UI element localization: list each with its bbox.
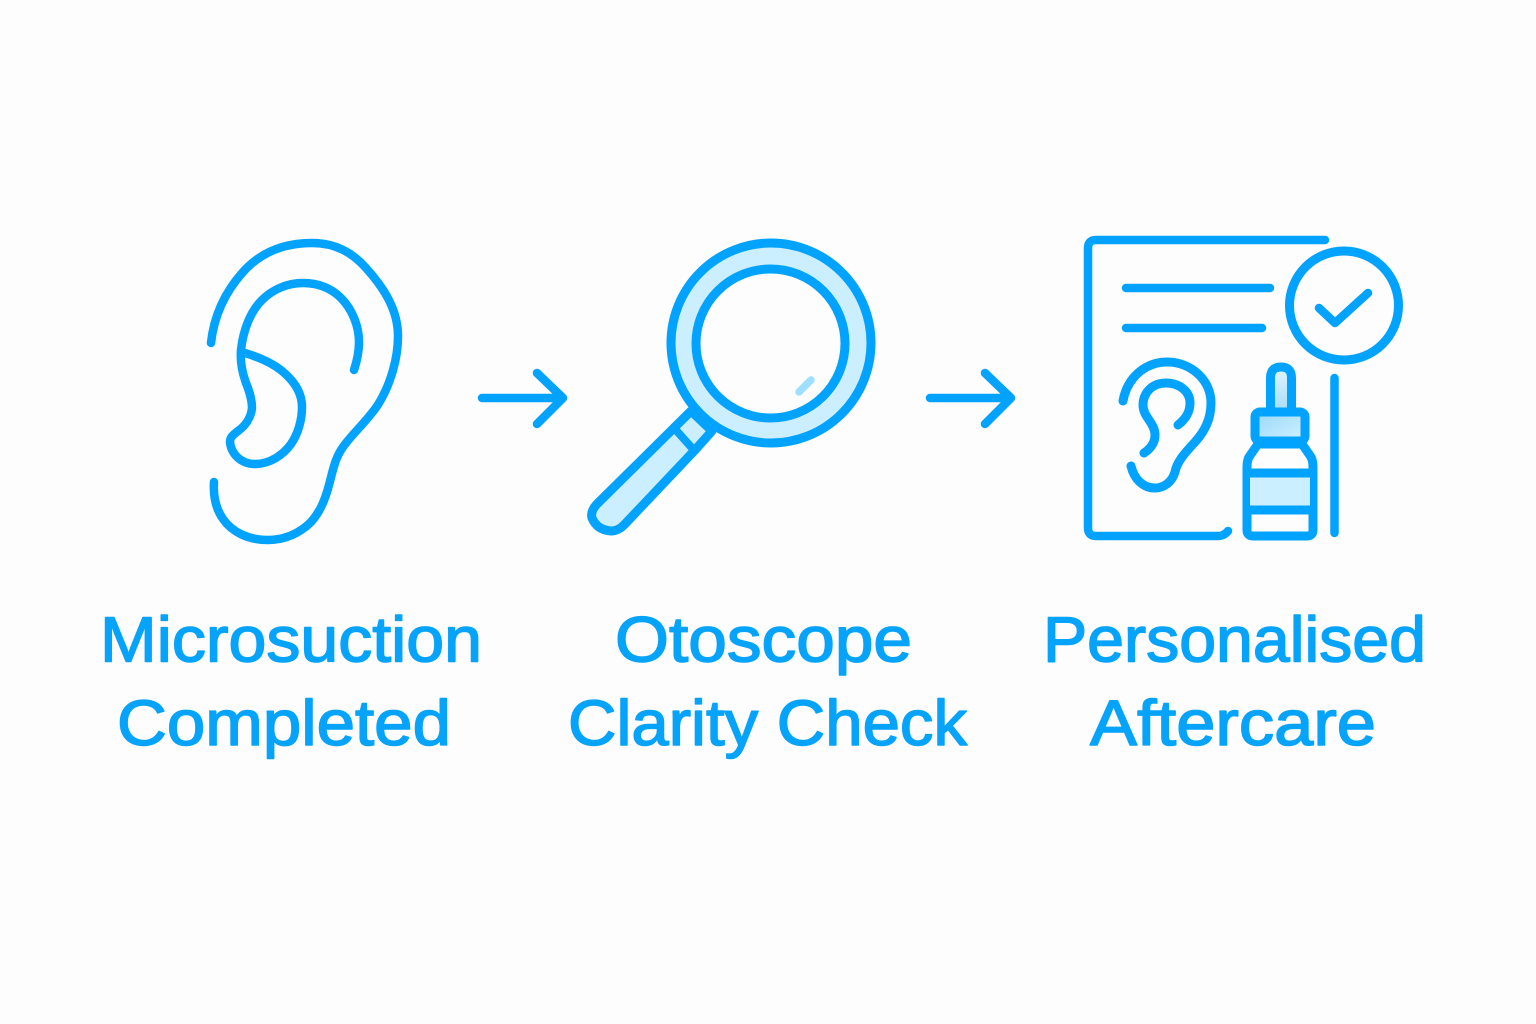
label: Microsuction Completed: Completed xyxy=(117,687,451,759)
label: Otoscope Clarity Check xyxy=(568,604,968,759)
arrow: step 2 to step 3 xyxy=(930,373,1011,424)
magnifier lens ring xyxy=(673,245,869,441)
label: Otoscope Clarity Check: Otoscope xyxy=(615,604,912,676)
icon: aftercare document xyxy=(1088,240,1398,536)
label: Microsuction Completed: Microsuction xyxy=(100,604,482,676)
panel: step 2 otoscope clarity check xyxy=(568,243,968,759)
label: Personalised Aftercare: Aftercare xyxy=(1090,687,1376,759)
label: Microsuction Completed xyxy=(100,604,482,759)
label: Personalised Aftercare: Personalised xyxy=(1043,604,1426,676)
arrow: step 1 to step 2 xyxy=(482,373,563,424)
check badge xyxy=(1290,251,1398,360)
small ear xyxy=(1123,362,1211,488)
vertical rule xyxy=(1330,378,1339,533)
magnifier handle xyxy=(592,411,712,531)
icon: ear outline xyxy=(211,243,398,540)
label: Otoscope Clarity Check: Clarity Check xyxy=(568,687,968,759)
magnifier collar divider xyxy=(675,429,692,448)
glass highlight xyxy=(799,380,811,392)
magnifier inner glass xyxy=(696,269,845,418)
label: Personalised Aftercare xyxy=(1043,604,1426,759)
dropper bottle xyxy=(1247,367,1313,536)
document text lines xyxy=(1126,288,1270,328)
panel: step 3 personalised aftercare xyxy=(1043,240,1426,759)
magnifier outer rim xyxy=(671,243,871,443)
document outline xyxy=(1088,240,1325,536)
panel: step 1 microsuction completed xyxy=(100,243,482,759)
icon: magnifying glass xyxy=(592,243,871,531)
